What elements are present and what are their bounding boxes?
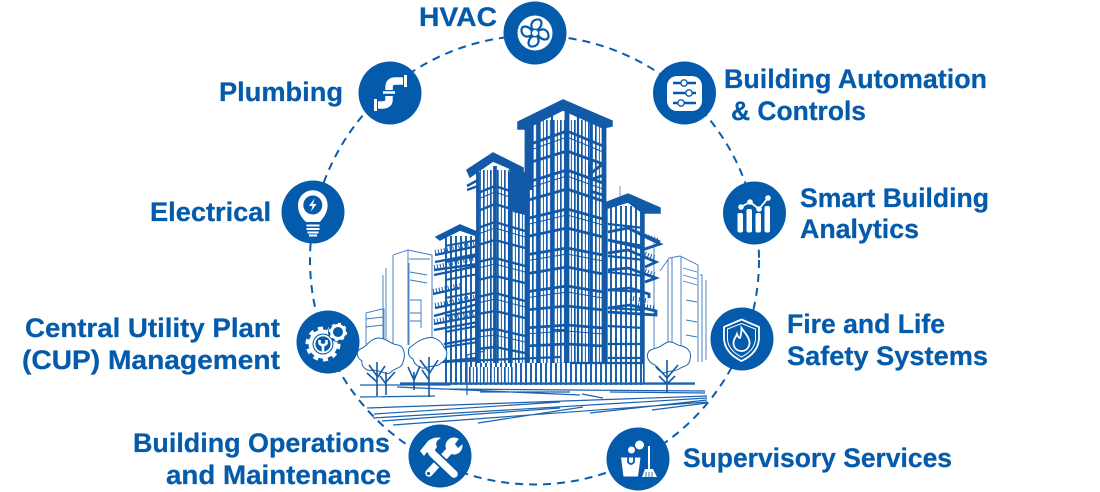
node: Central Utility Plant xyxy=(296,310,360,374)
node: Electrical xyxy=(282,180,344,244)
trees xyxy=(357,338,691,397)
label: Fire and Life Safety xyxy=(787,309,988,371)
ground and street lines xyxy=(360,383,707,425)
label: Central Utility Plant xyxy=(22,313,280,375)
icon: fan xyxy=(518,16,552,50)
label: Building Operations xyxy=(133,428,391,490)
node: Fire and Life Safety xyxy=(710,308,774,370)
icon: shield with flame xyxy=(724,320,759,361)
right tower xyxy=(604,186,660,384)
low left tower xyxy=(433,225,478,384)
label: Plumbing: Plumbing xyxy=(219,77,343,107)
label: Smart Building Analytics: Smart Building xyxy=(800,183,989,213)
node: Smart Building Analytics xyxy=(723,182,786,244)
label: Building Automation: & Controls xyxy=(731,96,866,126)
label: Central Utility Plant: (CUP) Management xyxy=(22,345,280,375)
icon: bars and trend line xyxy=(738,195,771,232)
ground floor colonnade xyxy=(441,357,644,385)
node: HVAC xyxy=(504,2,566,64)
icon: pipes xyxy=(376,75,406,111)
label: Fire and Life Safety: Safety Systems xyxy=(787,341,988,371)
label: Supervisory Services: Supervisory Services xyxy=(683,443,952,473)
label: Central Utility Plant: Central Utility Plant xyxy=(25,313,280,343)
label: Building Operations: Building Operations xyxy=(133,428,390,458)
left tower xyxy=(467,153,525,384)
label: Fire and Life Safety: Fire and Life xyxy=(787,309,945,339)
label: HVAC: HVAC xyxy=(419,2,497,32)
label: Smart Building Analytics xyxy=(800,183,989,244)
node: Building Automation xyxy=(653,62,716,124)
icon: hammer and wrench xyxy=(420,436,466,475)
label: Electrical: Electrical xyxy=(150,197,271,227)
icon: gears with wrench xyxy=(308,322,348,360)
icon: control sliders xyxy=(667,76,702,111)
node: Building Operations xyxy=(408,424,472,488)
central tower xyxy=(518,100,612,385)
dashed ring connecting services xyxy=(310,36,759,484)
label: Building Automation: Building Automation xyxy=(724,64,987,94)
node: Supervisory Services xyxy=(606,428,670,490)
building illustration xyxy=(357,100,707,425)
node: Plumbing xyxy=(358,62,422,124)
label: Building Operations: and Maintenance xyxy=(166,460,391,490)
background buildings xyxy=(366,243,706,362)
label: Smart Building Analytics: Analytics xyxy=(800,214,919,244)
icon: bucket and broom xyxy=(621,440,657,477)
icon: light bulb xyxy=(298,190,328,236)
label: Building Automation xyxy=(724,64,987,126)
